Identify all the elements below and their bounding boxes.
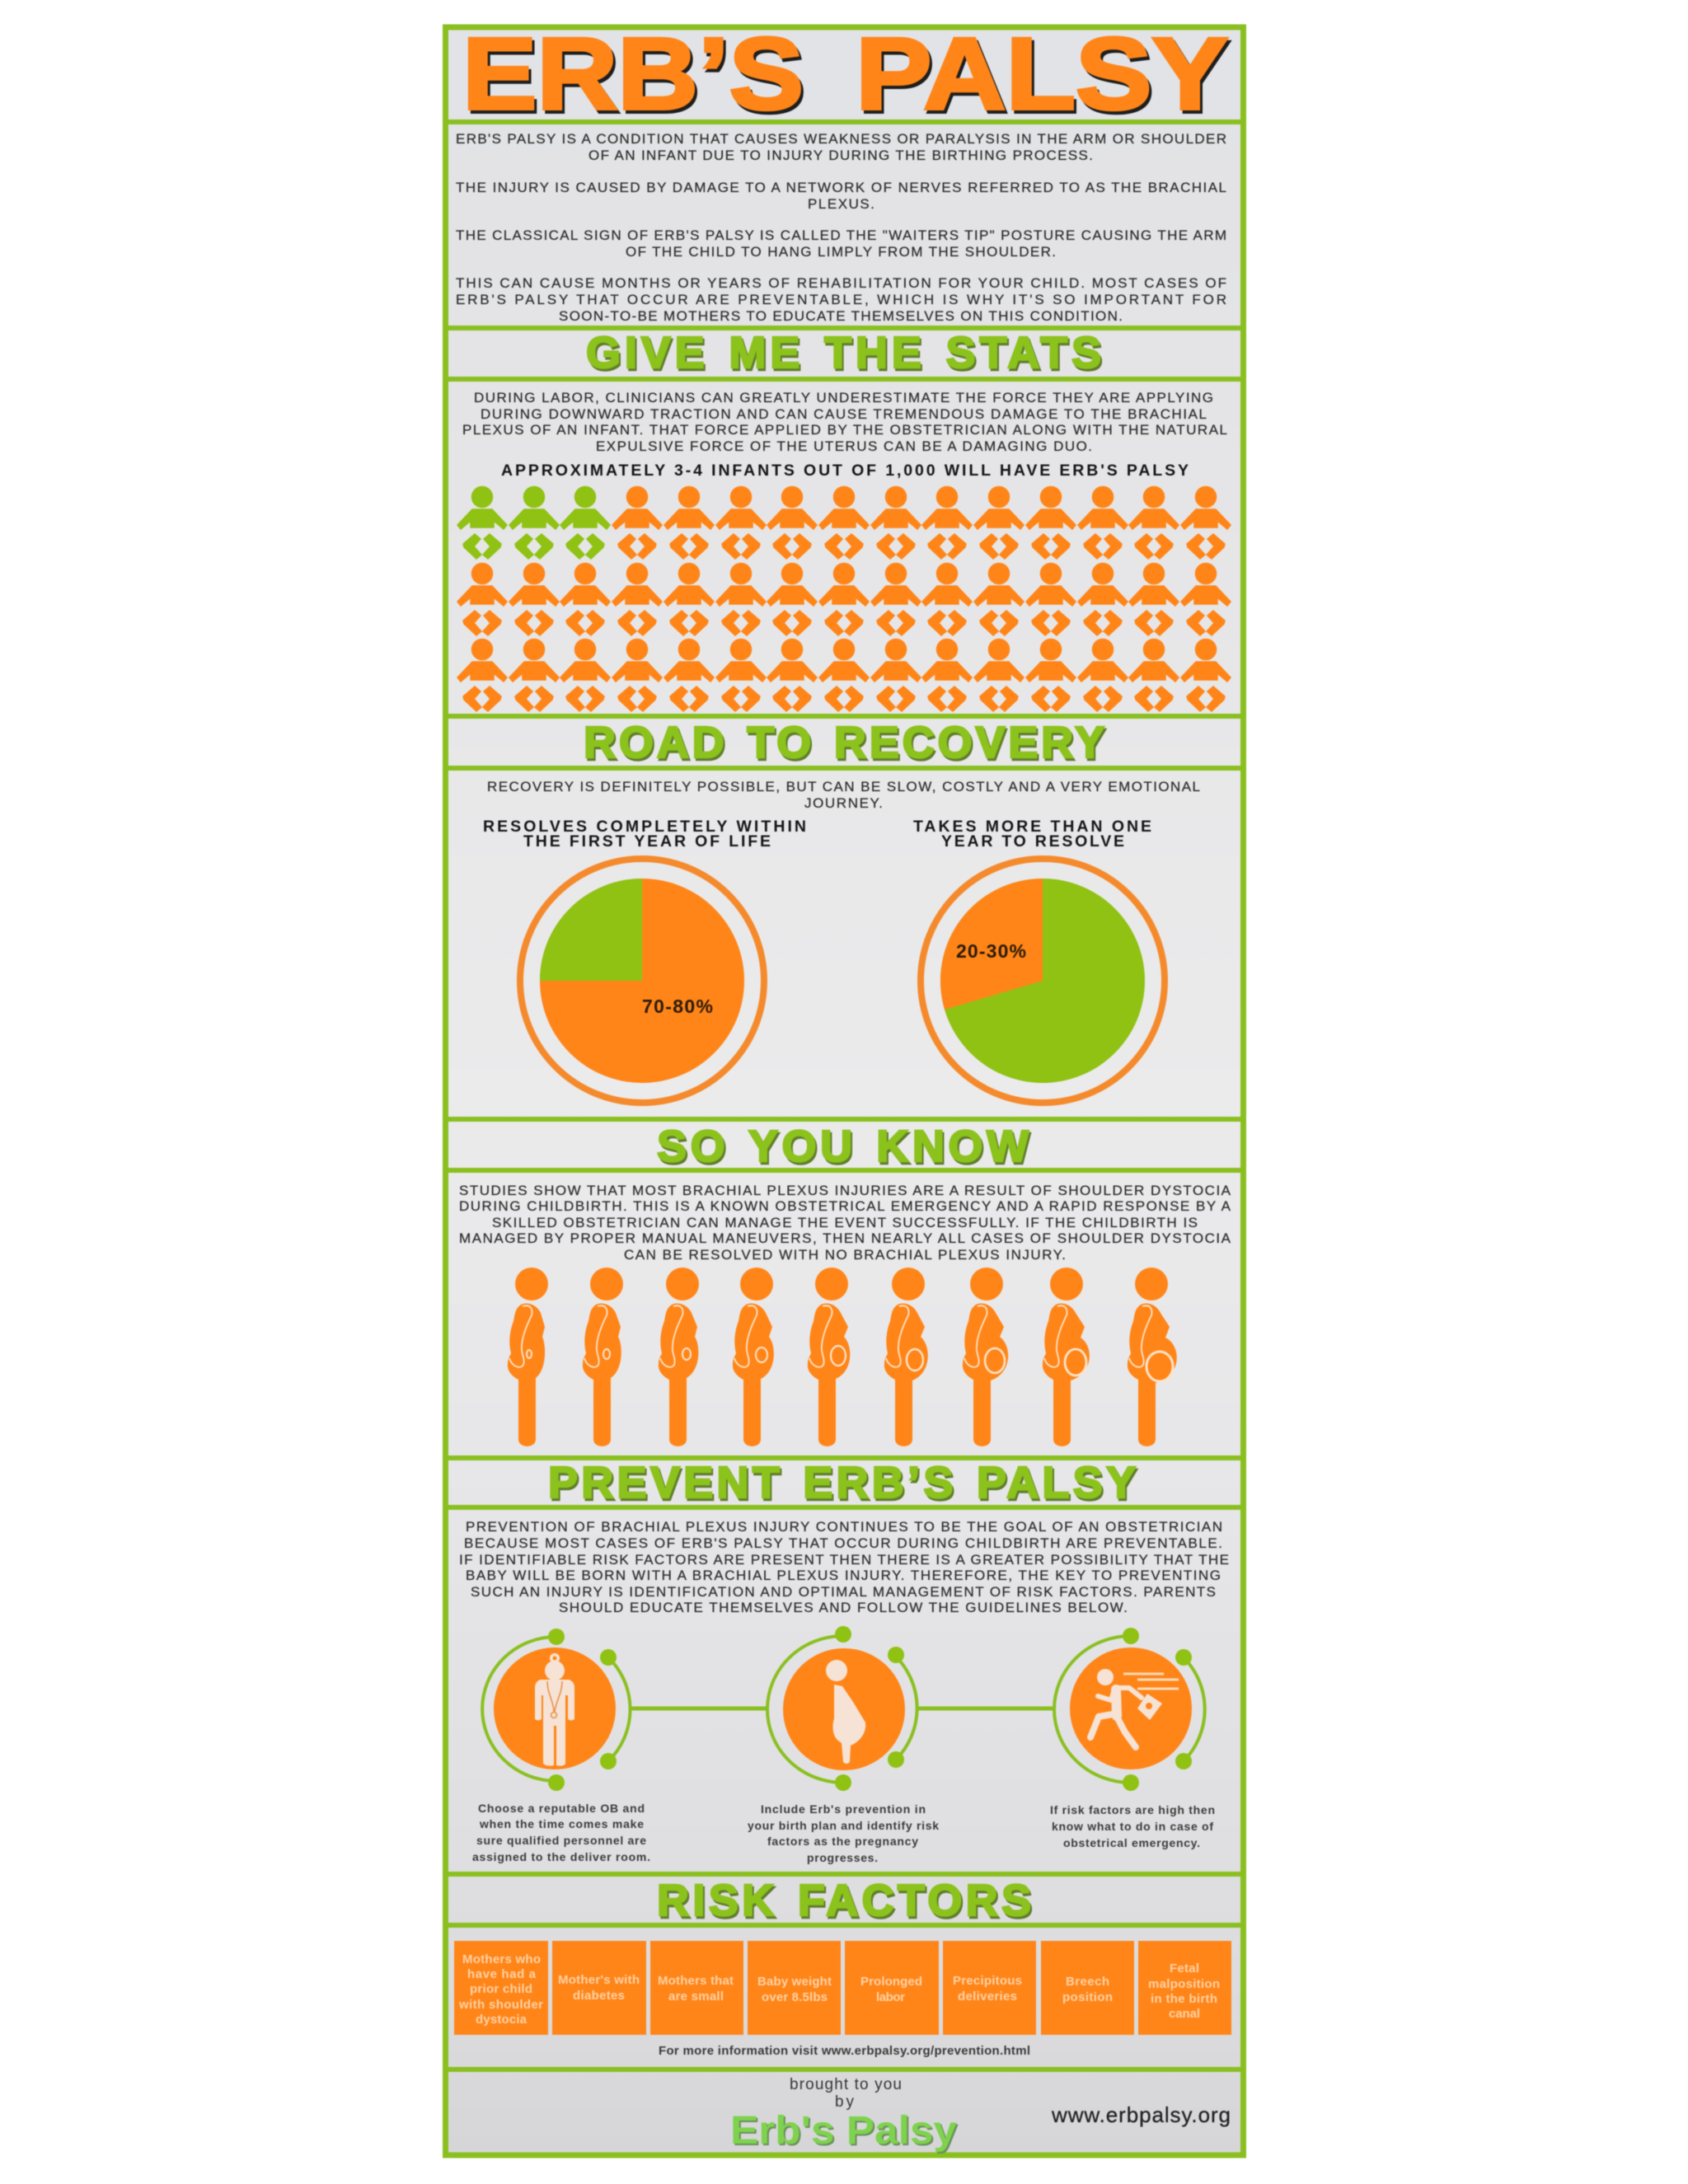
box: small mothers (650, 1941, 743, 2035)
prevention text: BABY WILL BE BORN WITH A BRACHIAL PLEXUS INJURY. THEREFORE, THE KEY TO PREVENTING (466, 1568, 1221, 1583)
heading: so you know: SO YOU KNOW (659, 1124, 1030, 1174)
caption: doctor (472, 1802, 650, 1863)
caption: birth plan: progresses. (807, 1851, 878, 1864)
pie label: first year (483, 818, 806, 851)
title: ERB’S (462, 17, 804, 131)
heading: road to recovery: ROAD TO RECOVERY (584, 718, 1104, 767)
heading: give me the stats: GIVE ME THE STATS (588, 330, 1103, 380)
recovery text (487, 779, 1200, 811)
caption: birth plan: your birth plan and identify risk (748, 1819, 939, 1832)
box: prolonged labor: Prolonged (860, 1975, 922, 1989)
pie label: first year: RESOLVES COMPLETELY WITHIN (483, 818, 806, 836)
box: prior child: have had a (467, 1967, 537, 1981)
so you know text: CAN BE RESOLVED WITH NO BRACHIAL PLEXUS INJURY. (624, 1247, 1066, 1263)
intro text: ERB'S PALSY THAT OCCUR ARE PREVENTABLE, WHICH IS WHY IT'S SO IMPORTANT FOR (456, 292, 1226, 307)
box: prior child: Mothers who (462, 1952, 541, 1966)
pie chart: 20-30%: 20-30% (956, 940, 1026, 962)
box: fetal malposition: malposition (1148, 1977, 1220, 1991)
box: prior child (454, 1941, 548, 2035)
box: precipitous deliveries (943, 1941, 1036, 2035)
title (462, 17, 1231, 134)
risk factor boxes (454, 1941, 1231, 2035)
heading: road to recovery: ROAD TO RECOVERY (585, 720, 1106, 770)
frame and background (443, 27, 1245, 2155)
step icon: pregnant mother (767, 1626, 917, 1791)
prevention text (459, 1519, 1229, 1615)
box: precipitous deliveries: Precipitous (953, 1974, 1022, 1988)
footer credit: brought to you (790, 2076, 902, 2093)
prevention text: SHOULD EDUCATE THEMSELVES AND FOLLOW THE GUIDELINES BELOW. (559, 1600, 1128, 1615)
prevention text: BECAUSE MOST CASES OF ERB'S PALSY THAT OCCUR DURING CHILDBIRTH ARE PREVENTABLE. (464, 1535, 1222, 1551)
caption: emergency: know what to do in case of (1052, 1820, 1213, 1833)
box: diabetes (552, 1941, 646, 2035)
title: PALSY (856, 17, 1228, 131)
connector lines (631, 1706, 1056, 1711)
caption: doctor: Choose a reputable OB and (478, 1802, 645, 1815)
caption: emergency: obstetrical emergency. (1063, 1836, 1200, 1849)
footer credit: Erb's Palsy (732, 2111, 959, 2154)
caption: doctor: when the time comes make (479, 1817, 644, 1830)
box: breech position: position (1062, 1990, 1113, 2004)
so you know text: DURING CHILDBIRTH. THIS IS A KNOWN OBSTETRICAL EMERGENCY AND A RAPID RESPONSE BY A (459, 1198, 1231, 1214)
icon array: infants (457, 486, 1231, 711)
so you know text: MANAGED BY PROPER MANUAL MANEUVERS, THEN NEARLY ALL CASES OF SHOULDER DYSTOCIA (459, 1230, 1231, 1246)
pie label: more than one year: YEAR TO RESOLVE (941, 832, 1124, 851)
title: PALSY (858, 21, 1231, 134)
pie chart: 20-30% (921, 859, 1165, 1103)
pie chart: 70-80% (520, 859, 764, 1103)
caption: birth plan (748, 1802, 939, 1864)
stats text: DURING DOWNWARD TRACTION AND CAN CAUSE TREMENDOUS DAMAGE TO THE BRACHIAL (481, 406, 1207, 422)
box: breech position (1041, 1941, 1134, 2035)
box: small mothers: are small (668, 1990, 724, 2004)
intro text: THE CLASSICAL SIGN OF ERB'S PALSY IS CALLED THE "WAITERS TIP" POSTURE CAUSING THE ARM (456, 227, 1226, 243)
footer credit: by (835, 2093, 854, 2111)
box: diabetes: diabetes (573, 1989, 625, 2003)
box: prolonged labor: labor (876, 1990, 905, 2004)
box: prolonged labor (845, 1941, 939, 2035)
box: fetal malposition: canal (1169, 2007, 1200, 2021)
footer credit (730, 2076, 959, 2154)
more information link: For more information visit www.erbpalsy.org/prevention.html (659, 2044, 1030, 2058)
heading: so you know: SO YOU KNOW (657, 1122, 1029, 1171)
box: baby weight (748, 1941, 841, 2035)
footer credit: Erb's Palsy (730, 2109, 957, 2153)
box: prior child: prior child (470, 1982, 532, 1996)
box: precipitous deliveries: deliveries (958, 1990, 1017, 2004)
intro text: THIS CAN CAUSE MONTHS OR YEARS OF REHABILITATION FOR YOUR CHILD. MOST CASES OF (456, 275, 1226, 291)
box: prior child: with shoulder (458, 1998, 543, 2012)
title: ERB’S (465, 21, 806, 134)
heading: risk factors: RISK FACTORS (659, 1878, 1033, 1928)
heading: prevent erb's palsy: PREVENT ERB’S PALSY (550, 1460, 1137, 1510)
stat callout: APPROXIMATELY 3-4 INFANTS OUT OF 1,000 WILL HAVE ERB'S PALSY (501, 462, 1189, 480)
intro text: THE INJURY IS CAUSED BY DAMAGE TO A NETWORK OF NERVES REFERRED TO AS THE BRACHIAL (456, 180, 1226, 195)
intro text: PLEXUS. (808, 196, 874, 212)
so you know text: STUDIES SHOW THAT MOST BRACHIAL PLEXUS INJURIES ARE A RESULT OF SHOULDER DYSTOCIA (459, 1183, 1231, 1198)
pie label: more than one year (913, 818, 1151, 851)
prevention text: PREVENTION OF BRACHIAL PLEXUS INJURY CONTINUES TO BE THE GOAL OF AN OBSTETRICIAN (466, 1519, 1222, 1535)
pie chart: 70-80%: 70-80% (642, 996, 713, 1017)
caption: doctor: assigned to the deliver room. (472, 1850, 650, 1863)
caption: birth plan: Include Erb's prevention in (761, 1802, 926, 1816)
box: baby weight: over 8.5lbs (762, 1990, 828, 2004)
caption: emergency: If risk factors are high then (1050, 1803, 1215, 1816)
footer website: www.erbpalsy.org (1051, 2102, 1231, 2127)
stats text: PLEXUS OF AN INFANT. THAT FORCE APPLIED BY THE OBSTETRICIAN ALONG WITH THE NATURAL (462, 422, 1227, 438)
stats text: EXPULSIVE FORCE OF THE UTERUS CAN BE A DAMAGING DUO. (596, 438, 1092, 454)
step icon: doctor (482, 1629, 631, 1791)
box: fetal malposition: in the birth (1151, 1992, 1217, 2006)
so you know text (459, 1183, 1231, 1263)
heading: give me the stats: GIVE ME THE STATS (586, 328, 1101, 377)
step icon: emergency runner (1054, 1628, 1205, 1791)
recovery text: RECOVERY IS DEFINITELY POSSIBLE, BUT CAN BE SLOW, COSTLY AND A VERY EMOTIONAL (487, 779, 1200, 794)
prevention text: SUCH AN INJURY IS IDENTIFICATION AND OPTIMAL MANAGEMENT OF RISK FACTORS. PARENTS (471, 1584, 1216, 1600)
stats text (462, 390, 1227, 454)
intro text: SOON-TO-BE MOTHERS TO EDUCATE THEMSELVES ON THIS CONDITION. (559, 308, 1123, 324)
box: prior child: dystocia (476, 2013, 528, 2027)
stats text: DURING LABOR, CLINICIANS CAN GREATLY UNDERESTIMATE THE FORCE THEY ARE APPLYING (474, 390, 1213, 405)
intro text (456, 131, 1226, 324)
intro text: OF AN INFANT DUE TO INJURY DURING THE BIRTHING PROCESS. (588, 148, 1093, 163)
box: fetal malposition: Fetal (1170, 1961, 1199, 1975)
so you know text: SKILLED OBSTETRICIAN CAN MANAGE THE EVENT SUCCESSFULLY. IF THE CHILDBIRTH IS (492, 1215, 1198, 1230)
caption: emergency (1050, 1803, 1215, 1849)
recovery text: JOURNEY. (804, 795, 883, 811)
prevention text: IF IDENTIFIABLE RISK FACTORS ARE PRESENT THEN THERE IS A GREATER POSSIBILITY THAT THE (459, 1552, 1229, 1568)
box: baby weight: Baby weight (757, 1975, 832, 1989)
heading: prevent erb's palsy: PREVENT ERB’S PALSY (548, 1458, 1136, 1507)
pie label: more than one year: TAKES MORE THAN ONE (913, 818, 1151, 836)
pie label: first year: THE FIRST YEAR OF LIFE (523, 832, 771, 851)
caption: birth plan: factors as the pregnancy (767, 1835, 918, 1848)
box: breech position: Breech (1066, 1975, 1109, 1989)
box: fetal malposition (1138, 1941, 1231, 2035)
box: diabetes: Mother's with (558, 1973, 640, 1987)
intro text: ERB'S PALSY IS A CONDITION THAT CAUSES WEAKNESS OR PARALYSIS IN THE ARM OR SHOULDER (456, 131, 1226, 147)
caption: doctor: sure qualified personnel are (476, 1834, 646, 1847)
heading: risk factors: RISK FACTORS (657, 1876, 1031, 1925)
box: small mothers: Mothers that (658, 1974, 734, 1988)
icon row: pregnancy stages (508, 1268, 1177, 1446)
intro text: OF THE CHILD TO HANG LIMPLY FROM THE SHOULDER. (626, 244, 1056, 260)
